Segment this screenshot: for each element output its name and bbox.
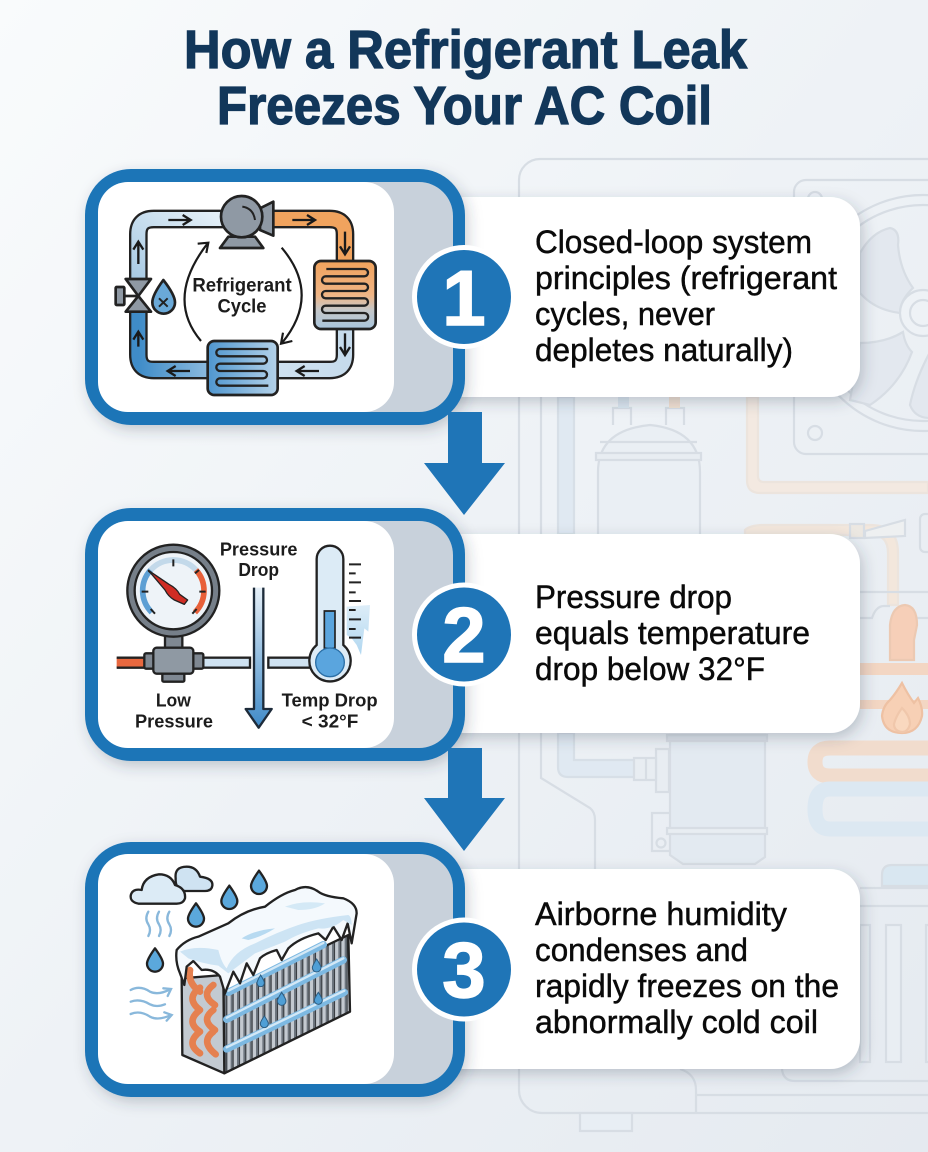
text: step 3: abnormally cold coil bbox=[535, 1004, 818, 1040]
thermometer bbox=[309, 546, 370, 681]
humidity waves bbox=[131, 912, 172, 1021]
title: Freezes Your AC Coil bbox=[217, 76, 712, 136]
label: Refrigerant Cycle bbox=[192, 276, 292, 318]
condenser coil bbox=[314, 261, 376, 329]
pipe flow arrows bbox=[133, 215, 350, 376]
gauge labels: Drop bbox=[238, 559, 279, 580]
cycle arrows bbox=[185, 243, 302, 344]
compressor bbox=[220, 196, 273, 248]
panel 2 frame bbox=[85, 508, 465, 761]
arrow: step 2 to step 3 bbox=[424, 748, 505, 851]
gauge labels: < 32°F bbox=[302, 710, 358, 731]
gauge labels: Pressure bbox=[135, 710, 213, 731]
text: step 1: principles (refrigerant bbox=[535, 260, 837, 296]
text: step 1 bbox=[535, 224, 837, 368]
text: step 2: equals temperature bbox=[535, 615, 810, 651]
text: step 2: Pressure drop bbox=[535, 579, 732, 615]
gauge labels: Low bbox=[156, 690, 191, 711]
badge 2: 2 bbox=[442, 591, 486, 679]
text: step 3: condenses and bbox=[535, 932, 748, 968]
title bbox=[184, 20, 748, 136]
text: step 1: cycles, never bbox=[535, 296, 715, 332]
label: Refrigerant Cycle: Refrigerant bbox=[192, 276, 292, 297]
icon: pressure gauge and thermometer bbox=[117, 539, 378, 731]
text: step 2 bbox=[535, 579, 810, 687]
clouds bbox=[131, 867, 212, 904]
badge 1 bbox=[412, 245, 516, 349]
text: step 1: Closed-loop system bbox=[535, 224, 812, 260]
water drops bbox=[147, 871, 267, 972]
text: step 3: rapidly freezes on the bbox=[535, 968, 839, 1004]
text: step 2: drop below 32°F bbox=[535, 651, 765, 687]
text: step 3: Airborne humidity bbox=[535, 896, 787, 932]
coil end plate with copper tubes bbox=[182, 970, 224, 1073]
gauge labels: Pressure bbox=[220, 539, 297, 560]
panel 1 frame bbox=[85, 169, 465, 425]
pipe line bbox=[117, 658, 310, 668]
expansion valve with leak drop bbox=[116, 279, 175, 314]
icon: refrigerant cycle bbox=[116, 196, 376, 395]
text: step 3 bbox=[535, 896, 839, 1040]
gauge bbox=[127, 545, 219, 682]
droplets on tubes bbox=[257, 959, 322, 1028]
coil fins bbox=[223, 935, 350, 1073]
badge 3: 3 bbox=[442, 926, 486, 1014]
text card 3 bbox=[430, 869, 860, 1069]
badge 2 bbox=[412, 582, 516, 686]
text card 2 bbox=[430, 534, 860, 733]
arrow: step 1 to step 2 bbox=[424, 412, 505, 515]
gauge labels: Temp Drop bbox=[282, 690, 378, 711]
label: Refrigerant Cycle: Cycle bbox=[217, 297, 267, 318]
refrigerant tubes bbox=[227, 943, 344, 1049]
pressure drop arrow bbox=[246, 588, 272, 728]
icon: frozen coil with humidity bbox=[131, 867, 357, 1073]
gauge labels bbox=[135, 539, 378, 731]
background: faded AC unit line art bbox=[519, 159, 928, 1131]
title: How a Refrigerant Leak bbox=[184, 20, 748, 80]
badge 1: 1 bbox=[442, 254, 486, 342]
text: step 1: depletes naturally) bbox=[535, 332, 793, 368]
panel 3 frame bbox=[85, 842, 465, 1097]
badge 3 bbox=[412, 918, 516, 1022]
ice cap bbox=[176, 887, 357, 993]
evaporator coil bbox=[208, 341, 278, 395]
text card 1 bbox=[430, 197, 860, 397]
